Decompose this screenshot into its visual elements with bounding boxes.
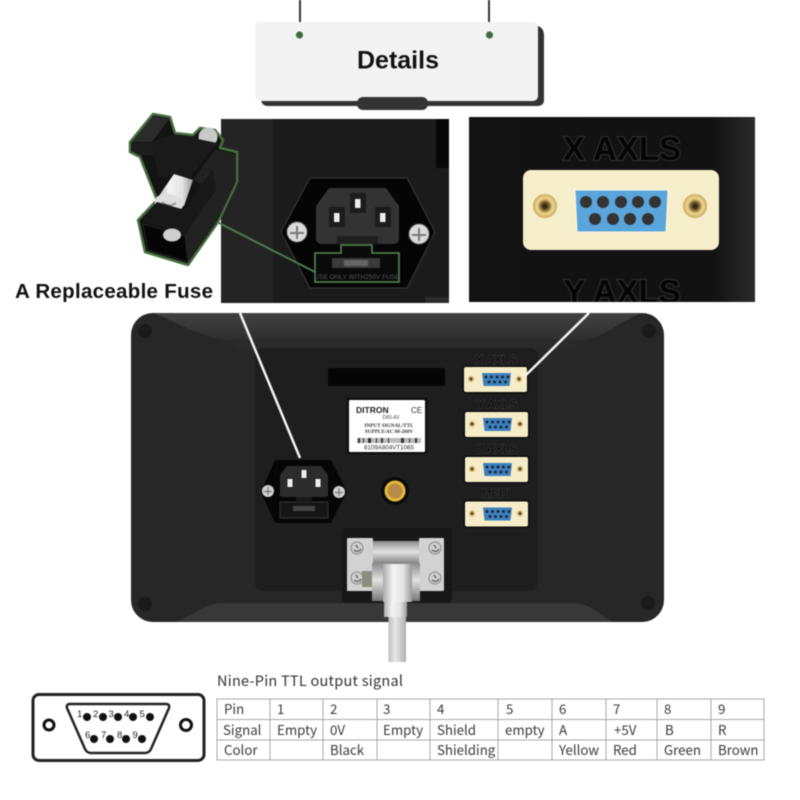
- table grid: [217, 699, 764, 760]
- pin numbers: 4: [124, 709, 129, 720]
- leader line: power inlet: [240, 313, 300, 458]
- panel: x axis connector close-up: [469, 117, 755, 310]
- row: pin: 9: [718, 699, 725, 718]
- upper clip: [132, 116, 169, 142]
- connector: z axls: [464, 442, 530, 484]
- row: pin: 2: [330, 699, 337, 718]
- product label: SUPPLY:AC 80-260V: [365, 429, 413, 435]
- d-sub socket: [575, 190, 668, 232]
- lower body: [185, 150, 236, 263]
- pin numbers: 6: [85, 730, 90, 741]
- row: color: Red: [613, 740, 637, 759]
- row: signal: Empty: [383, 720, 423, 739]
- panel: power inlet close-up: [221, 119, 449, 303]
- pin numbers: 2: [93, 709, 98, 720]
- product label: D60-4V: [383, 415, 400, 421]
- row: signal: +5V: [614, 720, 637, 739]
- product label: 8109A804VT1065: [364, 444, 415, 452]
- hanging strings: [300, 0, 489, 28]
- cable clamp: [347, 538, 444, 617]
- corner screw holes: [138, 324, 656, 611]
- gold grounding post: [381, 477, 409, 505]
- product label: DITRON: [356, 405, 389, 415]
- row: pin: 8: [664, 699, 671, 718]
- bottom bezel band: [175, 603, 613, 622]
- connector: mfpi: MFPI: [482, 487, 510, 501]
- pins: [83, 713, 154, 743]
- pin numbers: 8: [117, 730, 122, 741]
- row: color: Black: [330, 740, 365, 759]
- inlet plate: [281, 178, 435, 288]
- mounting screws: [287, 222, 429, 244]
- row: signal: empty: [505, 720, 545, 739]
- pin numbers: [77, 709, 145, 741]
- pin numbers: 3: [108, 709, 114, 720]
- thumb screws: [533, 194, 707, 218]
- cable clamp recess: [342, 528, 452, 603]
- leader line: fuse: [217, 222, 315, 272]
- fuse drawer: [314, 245, 400, 282]
- small power inlet: [261, 460, 347, 523]
- sign: details heading: [255, 22, 544, 110]
- row: pin: 5: [506, 699, 513, 718]
- product label: CE: [411, 406, 422, 415]
- top bezel band: [153, 313, 643, 340]
- row: pin: 4: [437, 699, 444, 718]
- connector: z axls: Z AXLS: [477, 442, 517, 456]
- panel: device rear view: [131, 313, 664, 622]
- pin numbers: 1: [77, 709, 82, 720]
- row: color: Shielding: [437, 740, 496, 759]
- row: color: [224, 740, 759, 759]
- connector: x axls: [462, 353, 528, 394]
- row: color: Green: [664, 740, 701, 759]
- diagram: nine-pin connector: [33, 694, 204, 760]
- row: pin: 6: [559, 699, 566, 718]
- pin numbers: 9: [132, 730, 138, 741]
- connector plate: [523, 170, 719, 250]
- row: pin: 3: [383, 699, 390, 718]
- product label: INPUT SIGNAL/TTL: [364, 423, 414, 429]
- socket pins: [329, 193, 391, 227]
- row: signal: 0V: [330, 720, 345, 739]
- connector: mfpi: [464, 487, 530, 528]
- recessed rear panel: [255, 348, 538, 591]
- sign: details heading: Details: [357, 46, 439, 74]
- connector: y axls: [464, 398, 530, 438]
- product label: [347, 398, 427, 454]
- row: signal: A: [559, 720, 568, 739]
- leader line: x axls connector: [525, 313, 589, 376]
- row: pin: 7: [613, 699, 620, 718]
- row: signal: Signal: [223, 720, 262, 739]
- pin numbers: 7: [101, 730, 106, 741]
- table title: Nine-Pin TTL output signal: [217, 670, 403, 691]
- rear silver cap: [198, 128, 218, 146]
- row: signal: R: [718, 720, 727, 739]
- silver fuse cap: [153, 174, 193, 214]
- row: pin: 1: [277, 699, 284, 718]
- axis labels: [563, 130, 681, 310]
- row: signal: B: [665, 720, 674, 739]
- label: a replaceable fuse: A Replaceable Fuse: [15, 280, 213, 303]
- pin numbers: 5: [140, 709, 145, 720]
- row: pin: [224, 699, 725, 718]
- cable: [388, 617, 406, 662]
- row: color: Yellow: [558, 740, 599, 759]
- row: color: Color: [224, 740, 258, 759]
- axis labels: Y AXLS: [563, 273, 681, 310]
- row: color: Brown: [718, 740, 759, 759]
- icon: replaceable fuse holder: [130, 114, 237, 265]
- row: signal: Shield: [437, 720, 476, 739]
- holder silhouette: [130, 114, 237, 265]
- connector: x axls: X AXLS: [475, 353, 517, 367]
- table: pin signal colour: [217, 699, 764, 760]
- connector: y axls: Y AXLS: [476, 398, 518, 412]
- blacked-out plate: [328, 368, 445, 386]
- row: signal: [223, 720, 727, 739]
- axis labels: X AXLS: [563, 130, 681, 167]
- row: signal: Empty: [277, 720, 317, 739]
- fuse drawer: USE ONLY WITH250V FUSE: [314, 274, 400, 281]
- inlet socket: [316, 188, 399, 244]
- row: pin: Pin: [224, 699, 244, 718]
